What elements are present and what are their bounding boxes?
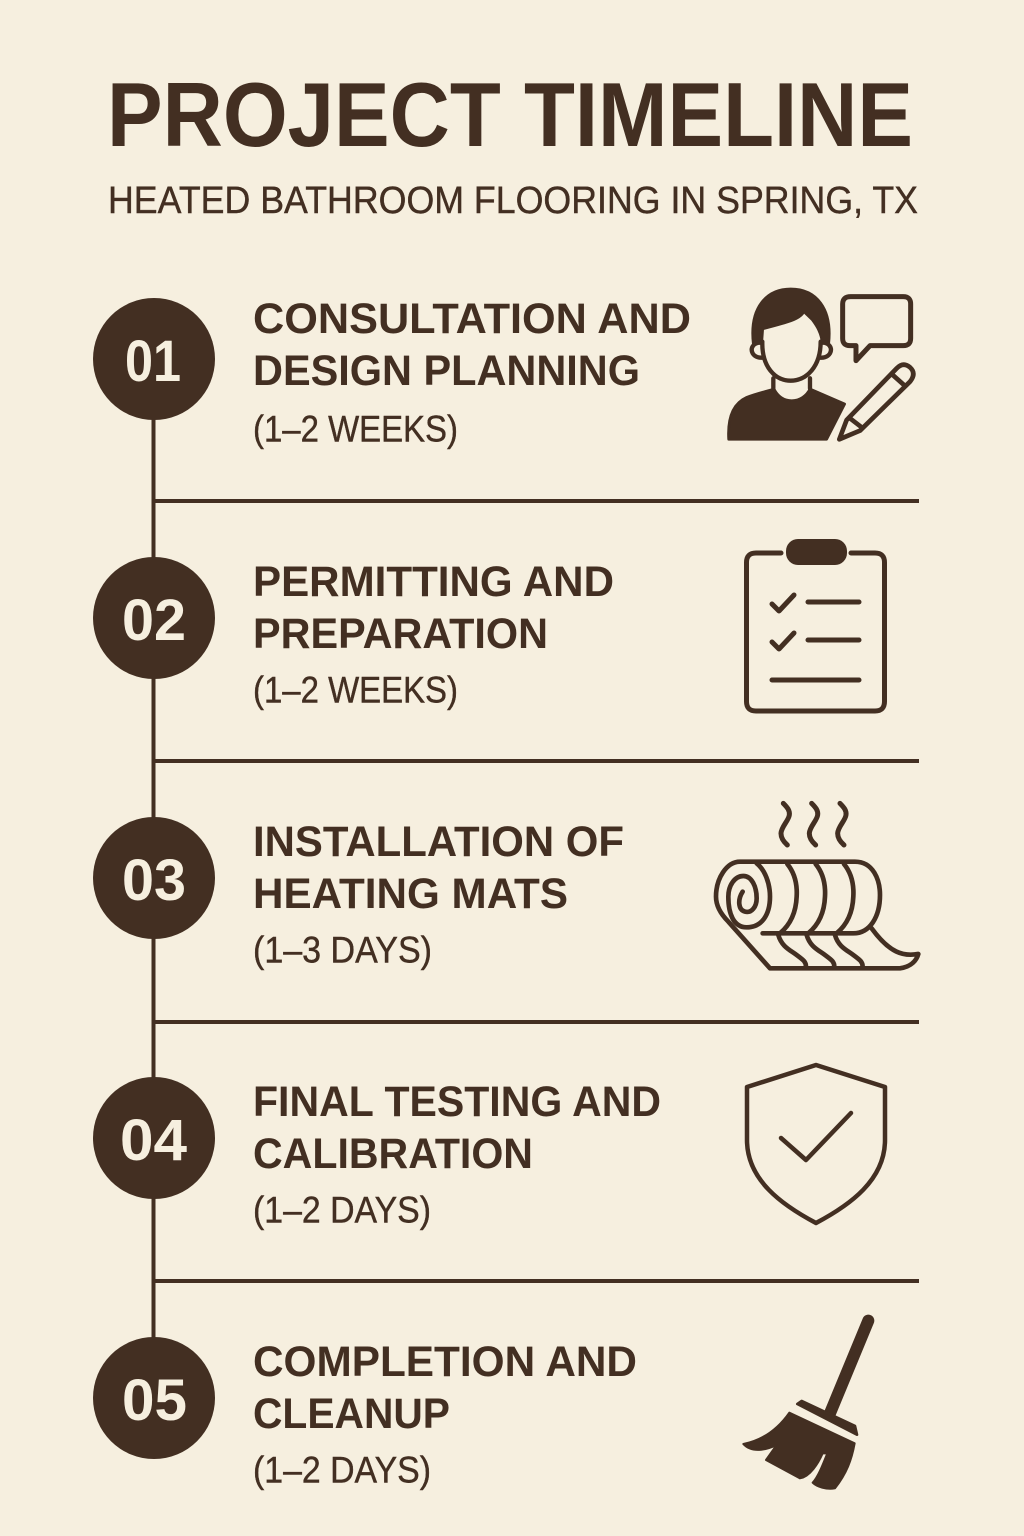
step 2 xyxy=(93,539,884,711)
step 2 number badge xyxy=(93,557,215,679)
step 4 number badge xyxy=(93,1077,215,1199)
step 3 heading xyxy=(253,818,624,918)
step 5 number badge: 05 xyxy=(122,1368,187,1433)
step 4 xyxy=(93,1065,885,1230)
step 3 duration: (1–3 DAYS) xyxy=(253,930,432,970)
icon: shield with check xyxy=(747,1065,885,1223)
title: PROJECT TIMELINE xyxy=(107,65,913,166)
step 1 heading xyxy=(253,295,691,395)
step 2 heading xyxy=(253,558,614,658)
step 3 heading: INSTALLATION OF xyxy=(253,818,624,866)
step 1 duration: (1–2 WEEKS) xyxy=(253,408,458,450)
step 2 heading: PERMITTING AND xyxy=(253,558,614,606)
step 1 heading: CONSULTATION AND xyxy=(253,295,691,343)
step 5 duration: (1–2 DAYS) xyxy=(253,1450,431,1490)
step 5 heading: COMPLETION AND xyxy=(253,1338,637,1386)
icon: consultant with speech bubble and pencil xyxy=(728,288,913,439)
step 3 heading: HEATING MATS xyxy=(253,870,568,918)
step 5 heading: CLEANUP xyxy=(253,1390,450,1438)
step 4 heading: FINAL TESTING AND xyxy=(253,1078,661,1126)
subtitle: HEATED BATHROOM FLOORING IN SPRING, TX xyxy=(108,180,918,222)
step 1 number badge xyxy=(93,298,215,420)
icon: checklist clipboard xyxy=(746,539,884,711)
step 3 number badge: 03 xyxy=(122,848,186,913)
step 1 heading: DESIGN PLANNING xyxy=(253,347,640,395)
step 2 heading: PREPARATION xyxy=(253,610,548,658)
step 2 duration: (1–2 WEEKS) xyxy=(253,670,458,710)
step 3 xyxy=(93,803,918,970)
step 5 xyxy=(93,1321,868,1490)
step 4 duration: (1–2 DAYS) xyxy=(253,1190,431,1230)
icon: heating mat roll xyxy=(716,803,918,968)
step 4 heading xyxy=(253,1078,661,1178)
step 4 number badge: 04 xyxy=(120,1108,187,1173)
step 5 number badge xyxy=(93,1337,215,1459)
step 4 heading: CALIBRATION xyxy=(253,1130,533,1178)
step 1 xyxy=(93,288,913,450)
step 2 number badge: 02 xyxy=(122,588,186,653)
step 5 heading xyxy=(253,1338,637,1438)
step 3 number badge xyxy=(93,817,215,939)
step 1 number badge: 01 xyxy=(125,329,181,394)
icon: broom xyxy=(743,1321,868,1489)
timeline connector xyxy=(152,359,156,1398)
